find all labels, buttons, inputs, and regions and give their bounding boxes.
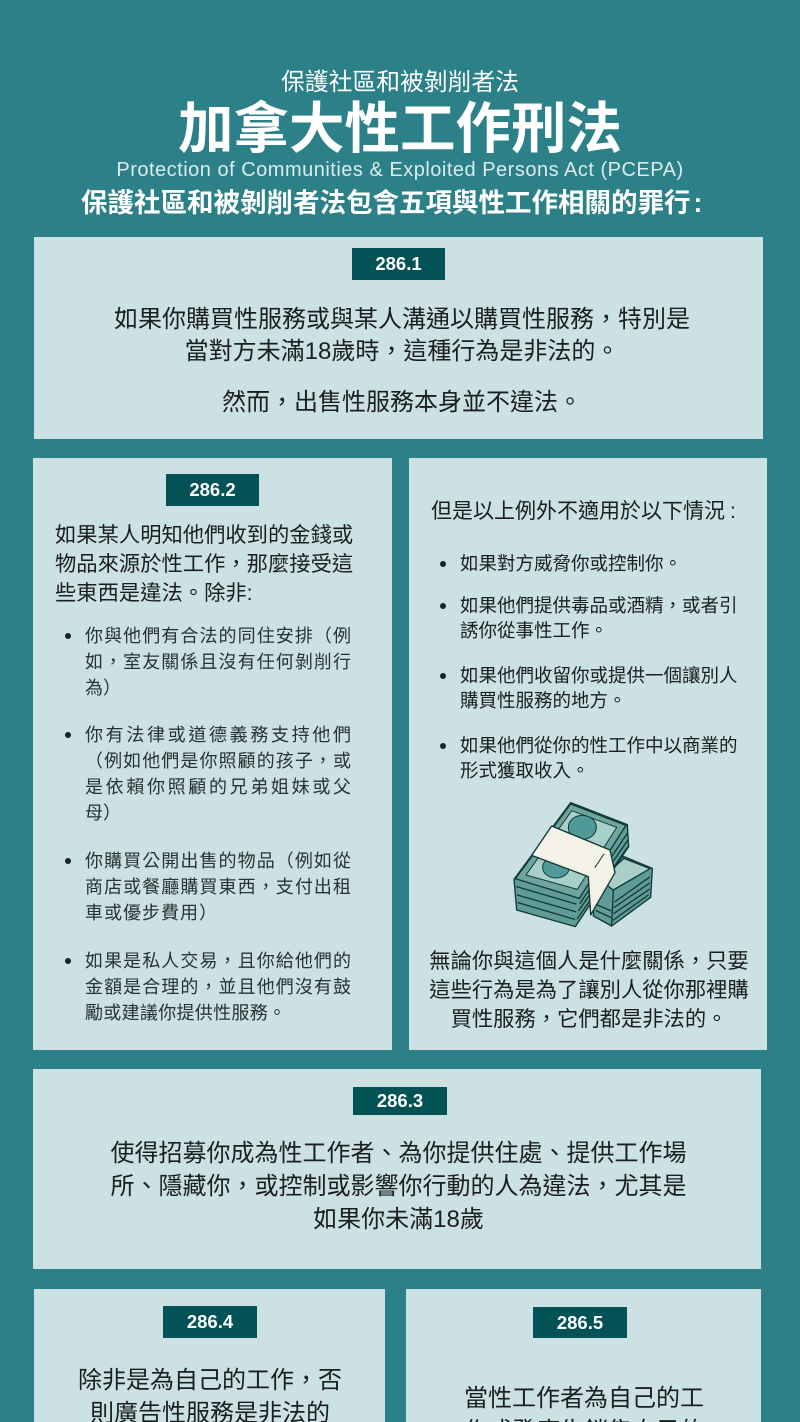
text: 286.1 body: 如果你購買性服務或與某人溝通以購買性服務，特別是 (114, 306, 690, 333)
text: exceptions conclusion (429, 949, 749, 1031)
bullet: commercial income (440, 735, 738, 781)
subtitle: 保護社區和被剝削者法 (281, 69, 519, 96)
bullet: shelter: 購買性服務的地方。 (460, 690, 627, 711)
english act name: Protection of Communities & Exploited Persons Act (PCEPA) (116, 159, 684, 181)
bullet: threat: 如果對方威脅你或控制你。 (460, 553, 682, 574)
label: 286.4 (163, 1306, 257, 1338)
text: 286.1 body (114, 306, 690, 365)
label: 286.3: 286.3 (377, 1090, 423, 1111)
label: 286.5: 286.5 (557, 1312, 603, 1333)
text: 286.2 intro: 如果某人明知他們收到的金錢或 (55, 523, 353, 547)
bullet: private transaction: 勵或建議你提供性服務。 (85, 1003, 286, 1023)
bullet: private transaction (65, 951, 351, 1023)
panel: 286.3 (33, 1069, 761, 1269)
text: 286.3 body: 使得招募你成為性工作者、為你提供住處、提供工作場 (110, 1140, 686, 1167)
title: 加拿大性工作刑法 (178, 98, 622, 160)
bullet: public goods: 商店或餐廳購買東西，支付出租 (85, 877, 351, 897)
bullet: commercial income: 形式獲取收入。 (460, 760, 590, 781)
label: 286.2 (166, 474, 259, 506)
text: 286.2 intro: 物品來源於性工作，那麼接受這 (55, 552, 353, 576)
bullet: private transaction: 如果是私人交易，且你給他們的 (85, 951, 351, 971)
bullet: private transaction: 金額是合理的，並且他們沒有鼓 (85, 977, 351, 997)
bullet: shelter (440, 665, 738, 711)
label: 286.1 (352, 248, 445, 280)
bullet: shared living: 如，室友關係且沒有任何剝削行 (85, 652, 351, 672)
text: 286.3 body (110, 1140, 686, 1233)
text: 286.3 body: 所、隱藏你，或控制或影響你行動的人為違法，尤其是 (110, 1173, 686, 1200)
bullet: drugs: 如果他們提供毒品或酒精，或者引 (460, 595, 738, 616)
icon: stack of money (513, 802, 653, 928)
intro heading: 保護社區和被剝削者法包含五項與性工作相關的罪行: (81, 188, 702, 218)
text: exceptions conclusion: 這些行為是為了讓別人從你那裡購 (429, 978, 749, 1002)
label: 286.3 (353, 1087, 447, 1115)
bullet: legal duty (65, 725, 351, 823)
text: exceptions conclusion: 無論你與這個人是什麼關係，只要 (429, 949, 749, 973)
panel: 286.5 (406, 1289, 761, 1422)
bullet: public goods: 你購買公開出售的物品（例如從 (85, 851, 351, 871)
bullet: legal duty: 母） (85, 803, 121, 823)
panel: 286.4 (34, 1289, 385, 1422)
label: 286.4: 286.4 (187, 1311, 233, 1332)
bullet: drugs: 誘你從事性工作。 (460, 620, 608, 641)
bullet: legal duty: 是依賴你照顧的兄弟姐妹或父 (85, 777, 351, 797)
header (81, 69, 702, 218)
text: 286.1 note: 然而，出售性服務本身並不違法。 (222, 389, 582, 416)
label: 286.1: 286.1 (375, 253, 422, 274)
bullet: legal duty: （例如他們是你照顧的孩子，或 (85, 751, 351, 771)
bullet: shelter: 如果他們收留你或提供一個讓別人 (460, 665, 738, 686)
text: 286.4 body (78, 1367, 342, 1422)
text: exceptions conclusion: 買性服務，它們都是非法的。 (451, 1007, 727, 1031)
bullet: shared living (65, 626, 351, 698)
text: 286.5 body: 當性工作者為自己的工 (464, 1385, 704, 1412)
bullet: legal duty: 你有法律或道德義務支持他們 (85, 725, 351, 745)
text: 286.2 intro: 些東西是違法。除非: (55, 581, 253, 605)
bullet: commercial income: 如果他們從你的性工作中以商業的 (460, 735, 738, 756)
bullet: public goods: 車或優步費用） (85, 903, 218, 923)
label: 286.5 (533, 1307, 627, 1338)
bullet: public goods (65, 851, 351, 923)
label: 286.2: 286.2 (189, 479, 236, 500)
text: 286.1 body: 當對方未滿18歲時，這種行為是非法的。 (185, 338, 619, 365)
text: 286.3 body: 如果你未滿18歲 (313, 1206, 484, 1233)
text: 286.2 intro (55, 523, 353, 605)
text: 286.4 body: 除非是為自己的工作，否 (78, 1367, 342, 1394)
bullet: shared living: 你與他們有合法的同住安排（例 (85, 626, 351, 646)
bullet: drugs (440, 595, 738, 641)
bullet: shared living: 為） (85, 678, 121, 698)
panel: 286.2 (33, 458, 392, 1050)
text: exceptions heading: 但是以上例外不適用於以下情況: (431, 500, 736, 523)
panel: exceptions (409, 458, 767, 1050)
panel: 286.1 (34, 237, 763, 439)
